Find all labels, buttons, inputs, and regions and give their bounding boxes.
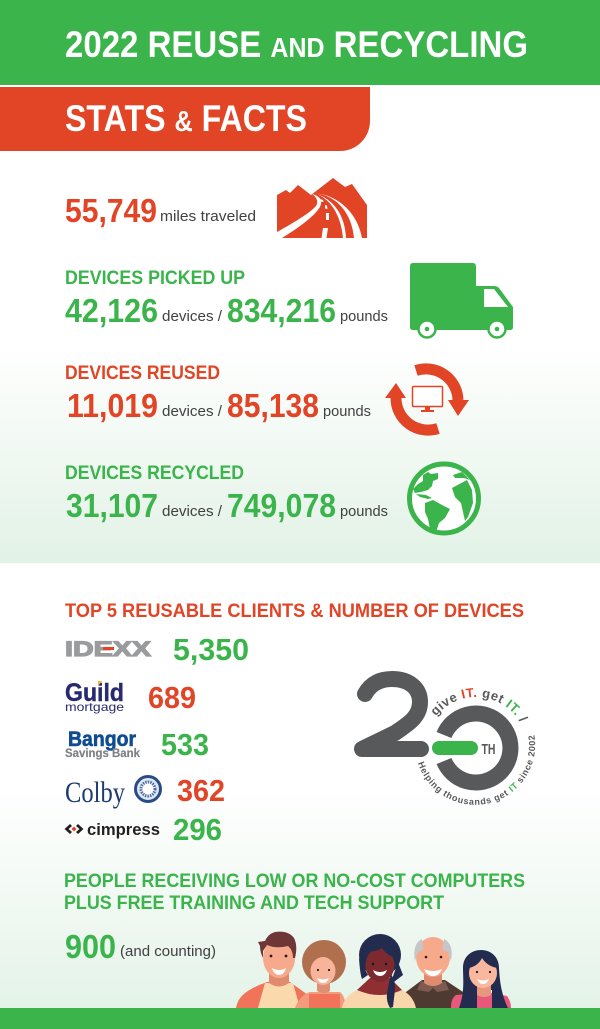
- icon: mountain road: [277, 178, 367, 238]
- footer band: [0, 1008, 600, 1029]
- logo: Bangor Savings Bank: Bangor: [68, 728, 136, 751]
- panel: stats background: [0, 345, 600, 563]
- logo: Bangor Savings Bank: Savings Bank: [65, 746, 140, 760]
- panel: clients background: [0, 790, 600, 1008]
- subtitle banner: [0, 87, 370, 151]
- stat: devices recycled: DEVICES RECYCLED: [65, 462, 244, 484]
- stat: devices reused: [65, 362, 371, 424]
- person 1: [236, 932, 308, 1008]
- stat: 900 and counting: (and counting): [120, 944, 216, 960]
- icon: reuse arrows with monitor: [385, 369, 469, 430]
- icon: truck: [410, 263, 513, 338]
- title banner: [0, 0, 600, 85]
- braid: [387, 974, 395, 1008]
- stat: devices reused: pounds: [323, 404, 371, 420]
- tagline: give IT. get IT.: give IT. get IT. /: [432, 688, 528, 722]
- count: 533: 533: [161, 727, 209, 762]
- logo: IDEXX: IDEXX: [65, 638, 151, 661]
- heading: people receiving computers: PEOPLE RECEIVING LOW OR NO-COST COMPUTERS: [64, 870, 525, 892]
- stat: devices picked up: devices /: [162, 309, 223, 325]
- stat: devices reused: 85,138: [227, 387, 319, 424]
- stat: devices picked up: 42,126: [65, 292, 158, 329]
- stat: miles traveled: miles traveled: [160, 209, 256, 225]
- heading: people receiving computers: PLUS FREE TRAINING AND TECH SUPPORT: [64, 892, 444, 914]
- stat: devices picked up: DEVICES PICKED UP: [65, 267, 245, 289]
- client row: Guild Mortgage: [65, 679, 196, 715]
- stat: devices recycled: 749,078: [227, 487, 336, 524]
- stat: 900 and counting: 900: [65, 928, 116, 965]
- count: 5,350: 5,350: [173, 632, 249, 667]
- client row: Colby: [65, 773, 225, 809]
- client row: Bangor Savings Bank: [65, 727, 209, 762]
- logo: 20th anniversary: [354, 671, 536, 805]
- logo: Colby: Colby: [65, 776, 125, 809]
- count: 689: 689: [148, 680, 196, 715]
- green pill: [432, 741, 478, 755]
- stat: devices recycled: devices /: [162, 504, 223, 520]
- logo: Cimpress: cimpress: [87, 820, 160, 839]
- person 3: [342, 934, 416, 1008]
- person 4: [406, 937, 463, 1008]
- stat: miles traveled: 55,749: [65, 192, 157, 229]
- icon: globe: [410, 464, 478, 533]
- person 2: [295, 940, 346, 1008]
- illustration: five people: [236, 932, 511, 1008]
- heading: top 5 clients: TOP 5 REUSABLE CLIENTS & NUMBER OF DEVICES: [65, 601, 524, 622]
- stat: miles traveled: [65, 192, 256, 229]
- logo: Guild Mortgage: Guild: [65, 679, 124, 707]
- stat: devices recycled: 31,107: [66, 487, 158, 524]
- stat: 900 and counting: [65, 928, 216, 965]
- stat: devices picked up: pounds: [340, 309, 388, 325]
- title: 2022 REUSE AND RECYCLING: [65, 24, 528, 65]
- stat: devices reused: DEVICES REUSED: [65, 362, 220, 384]
- client row: Cimpress: [64, 812, 222, 847]
- tagline: helping thousands: Helping thousands get IT since 2002: [418, 735, 536, 805]
- logo: Guild Mortgage: mortgage: [65, 700, 124, 714]
- count: 296: 296: [173, 812, 222, 847]
- count: 362: 362: [177, 773, 225, 808]
- stat: devices picked up: 834,216: [227, 292, 336, 329]
- TH mark: TH: [482, 741, 496, 758]
- heading: people receiving computers: [64, 870, 525, 914]
- person 5: [451, 950, 511, 1008]
- stat: devices picked up: [65, 267, 388, 329]
- logo: Bangor Savings Bank: [65, 728, 140, 760]
- stat: devices recycled: [65, 462, 388, 524]
- stat: devices reused: 11,019: [67, 387, 158, 424]
- client row: IDEXX: [65, 632, 249, 667]
- stat: devices reused: devices /: [162, 404, 223, 420]
- stat: devices recycled: pounds: [340, 504, 388, 520]
- subtitle: STATS & FACTS: [65, 98, 307, 139]
